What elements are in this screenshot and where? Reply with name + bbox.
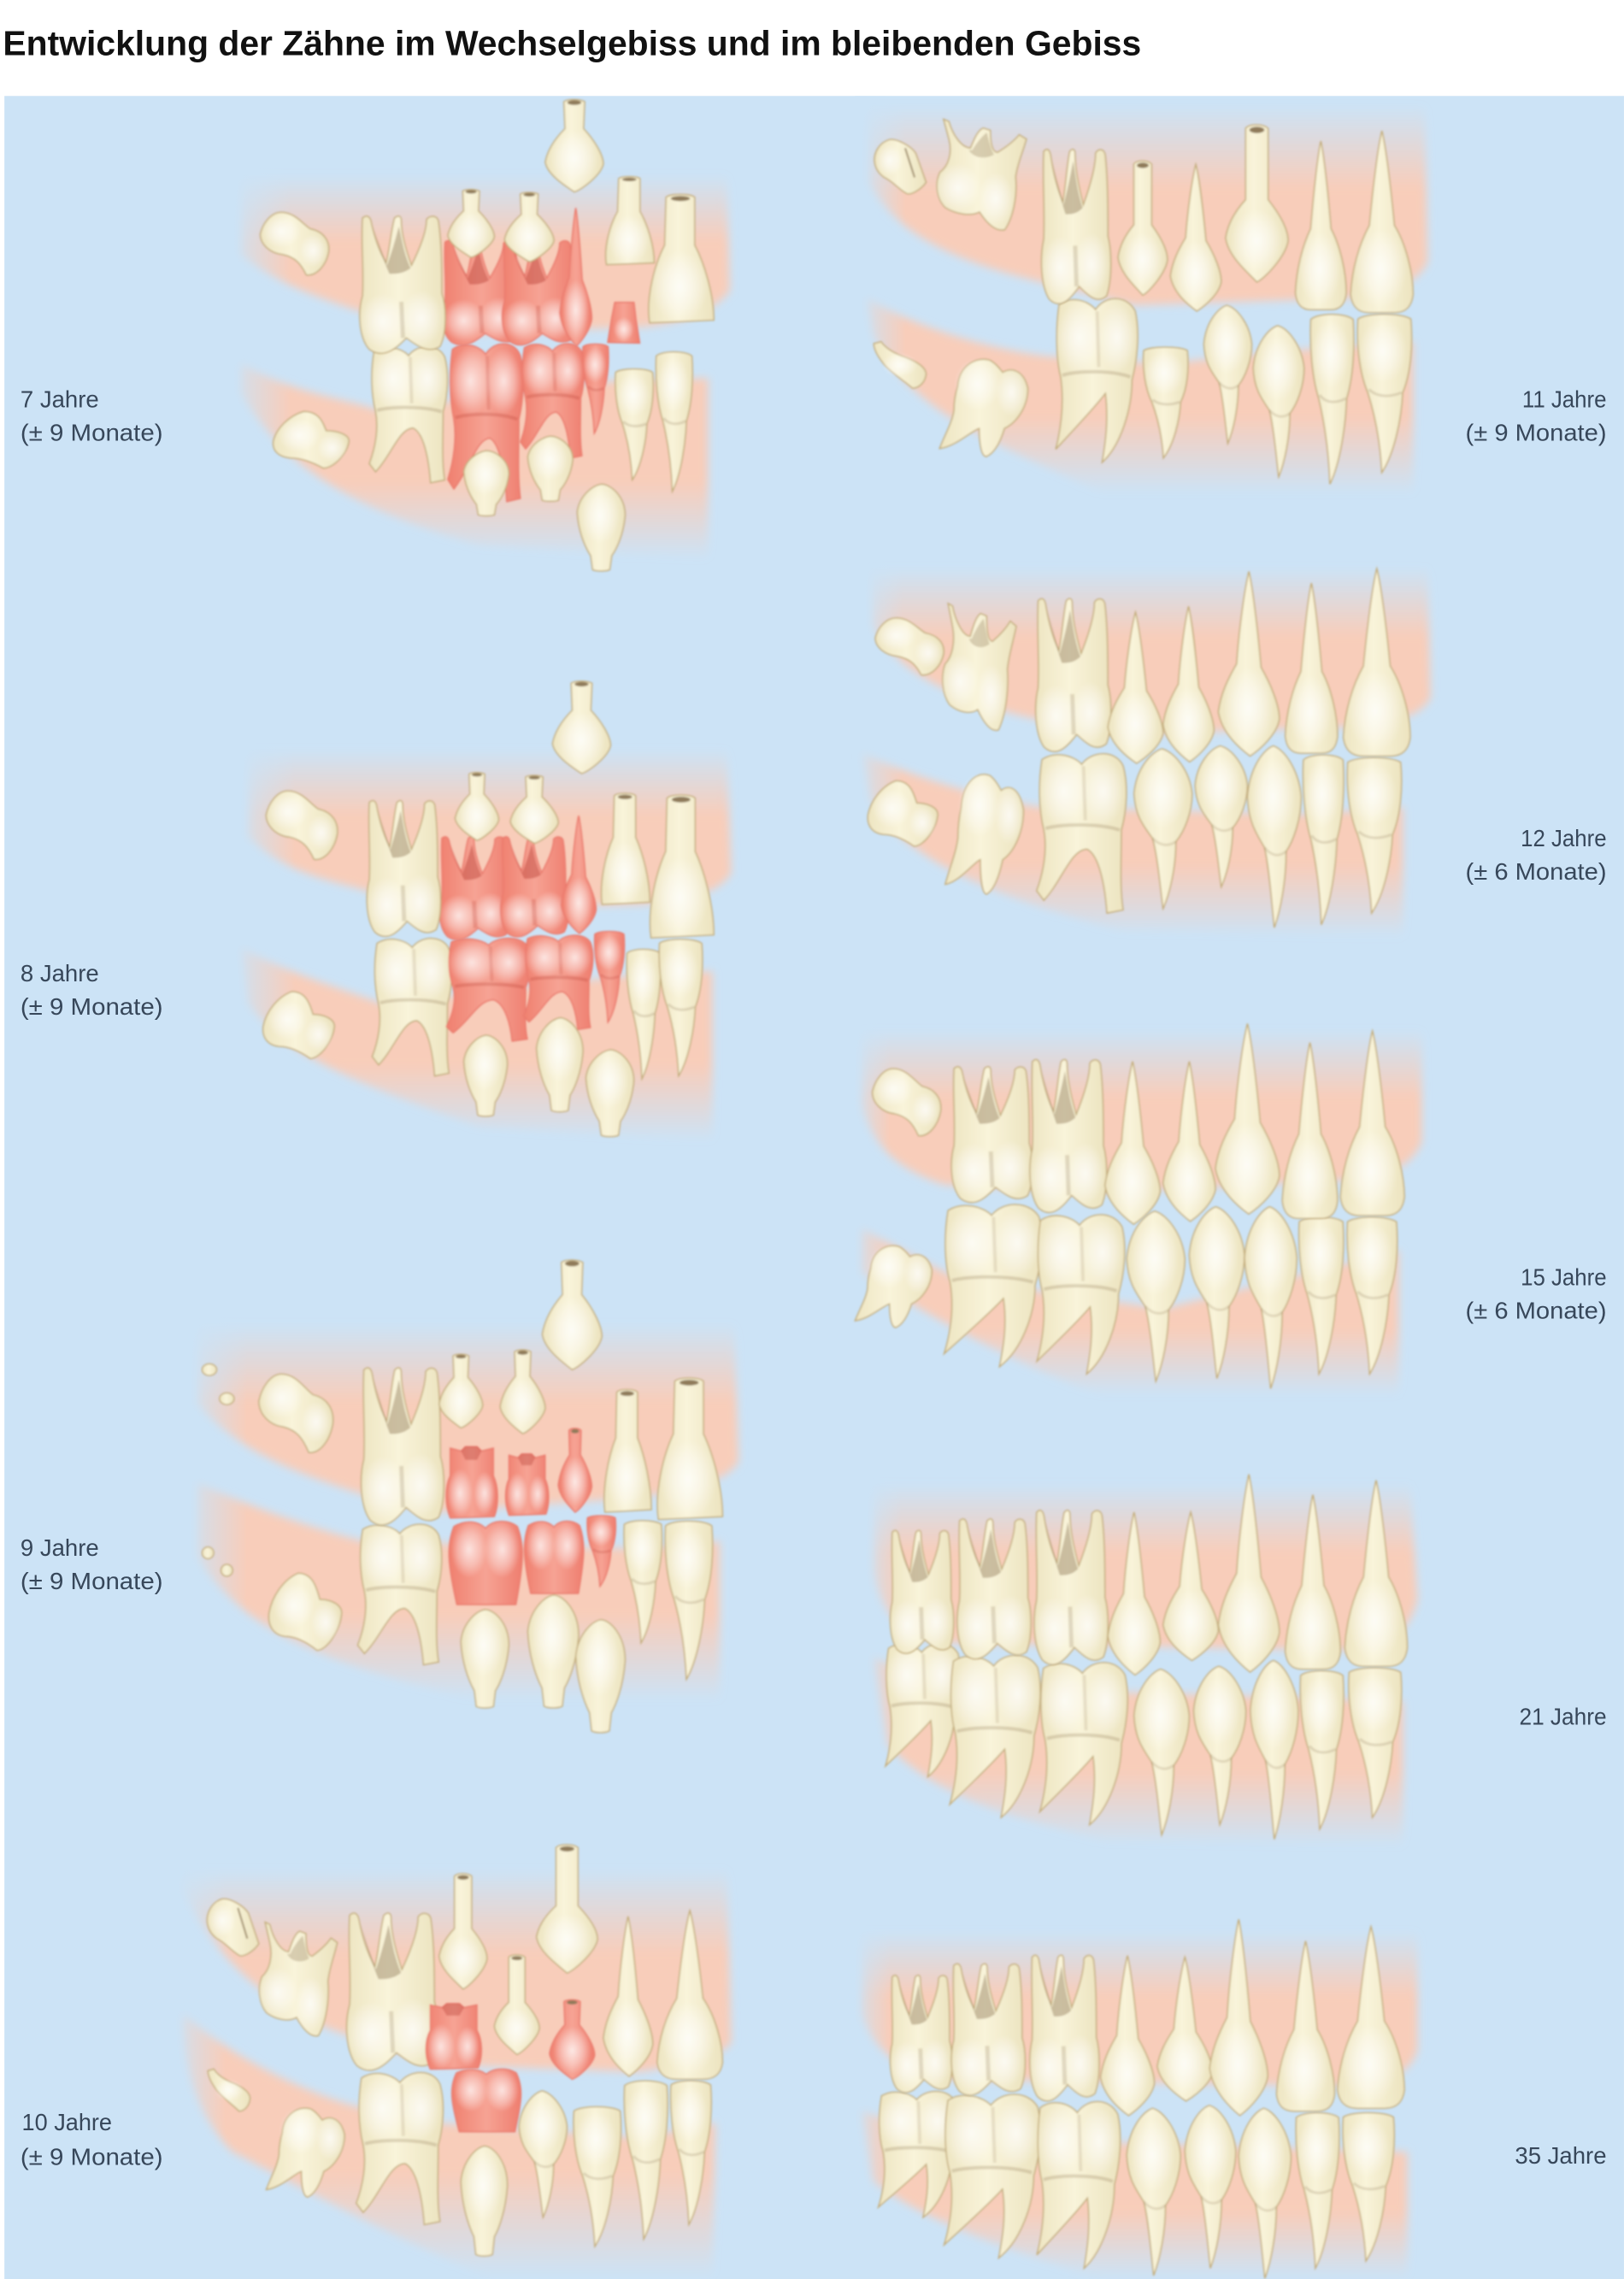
gum: upper xyxy=(865,104,1427,305)
age label xyxy=(1466,386,1607,445)
upper teeth xyxy=(890,1475,1408,1675)
panel: 21 Jahre xyxy=(858,1475,1607,1854)
gum: lower xyxy=(240,363,708,560)
panel: 9 Jahre xyxy=(21,1260,738,1733)
panel: 35 Jahre xyxy=(846,1919,1607,2278)
gum: upper xyxy=(182,1869,732,2072)
age label: 7 Jahre xyxy=(21,386,99,412)
lower teeth xyxy=(868,746,1402,928)
upper teeth xyxy=(873,1023,1404,1224)
gum: upper xyxy=(240,174,730,334)
age label xyxy=(21,960,163,1020)
lower teeth xyxy=(874,298,1412,484)
gum: upper xyxy=(873,1483,1417,1651)
upper teeth xyxy=(259,1260,722,1525)
gum: lower xyxy=(240,948,712,1141)
age label xyxy=(21,386,163,445)
age label: 8 Jahre xyxy=(21,960,99,986)
gum: lower xyxy=(873,1658,1403,1846)
age label: 11 Jahre xyxy=(1522,386,1607,412)
age label: (± 9 Monate) xyxy=(21,993,163,1020)
upper teeth xyxy=(875,568,1410,763)
panel: 10 Jahre xyxy=(21,1845,732,2278)
gum: upper xyxy=(861,1029,1422,1192)
lower teeth xyxy=(263,932,703,1137)
age label xyxy=(21,1534,163,1594)
gum: upper xyxy=(247,749,732,909)
lower teeth xyxy=(855,1204,1397,1388)
age label: 9 Jahre xyxy=(21,1534,99,1561)
gum: lower xyxy=(861,753,1403,938)
gum: upper xyxy=(861,1931,1417,2087)
lower teeth xyxy=(268,1516,713,1733)
lower teeth xyxy=(208,2069,711,2256)
age label xyxy=(21,2109,163,2170)
age label: (± 6 Monate) xyxy=(1466,858,1607,885)
upper teeth xyxy=(266,681,714,939)
developing tooth germs xyxy=(202,1363,234,1576)
panel: 15 Jahre xyxy=(846,1018,1607,1403)
age label xyxy=(1466,1264,1607,1324)
panel: 8 Jahre xyxy=(21,681,732,1149)
age label: 12 Jahre xyxy=(1521,825,1607,851)
age label: (± 9 Monate) xyxy=(21,419,163,445)
panel: 7 Jahre xyxy=(21,99,730,571)
upper teeth xyxy=(207,1845,722,2079)
age label xyxy=(1466,825,1607,885)
gum: lower xyxy=(861,1228,1398,1396)
age label: 35 Jahre xyxy=(1515,2142,1607,2169)
upper teeth xyxy=(874,119,1413,313)
lower teeth xyxy=(879,2091,1394,2278)
age label: (± 9 Monate) xyxy=(1466,419,1607,445)
upper teeth xyxy=(261,99,714,353)
gum: lower xyxy=(182,2014,715,2278)
gum: lower xyxy=(865,298,1413,494)
gum: upper xyxy=(869,567,1431,734)
title: Entwicklung der Zähne im Wechselgebiss und im bleibenden Gebiss xyxy=(3,24,1141,63)
age label: 21 Jahre xyxy=(1519,1703,1607,1729)
gum: lower xyxy=(197,1483,720,1701)
gum: lower xyxy=(861,2111,1408,2278)
age label: (± 9 Monate) xyxy=(21,1568,163,1594)
age label: 10 Jahre xyxy=(22,2109,112,2135)
upper teeth xyxy=(890,1919,1404,2116)
panel: 12 Jahre xyxy=(852,560,1607,945)
age label: (± 6 Monate) xyxy=(1466,1298,1607,1324)
lower teeth xyxy=(886,1644,1402,1840)
age label: 15 Jahre xyxy=(1521,1264,1607,1291)
gum: upper xyxy=(197,1323,738,1512)
panel: 11 Jahre xyxy=(855,96,1607,502)
lower teeth xyxy=(274,344,692,571)
age label: (± 9 Monate) xyxy=(21,2144,163,2170)
